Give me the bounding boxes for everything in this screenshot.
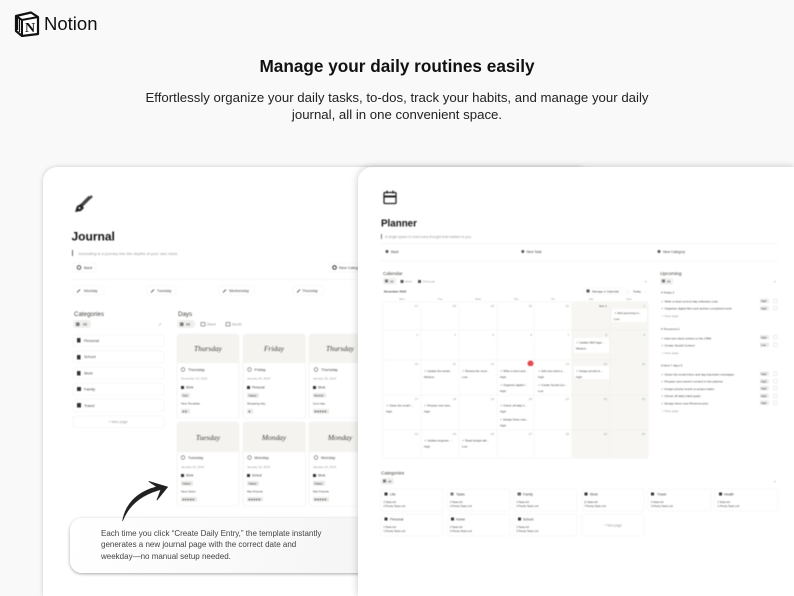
categories list: ↗ (158, 322, 161, 327)
journal card: Thursday: Sad (182, 394, 188, 398)
calendar day numbers: 23 (642, 397, 645, 401)
days tabs (177, 311, 242, 328)
journal card: Thursday: Thursday (188, 367, 205, 372)
journal card: Tuesday: Tuesday (188, 455, 203, 460)
journal card: Monday: ★★★★★ (248, 498, 261, 502)
upcoming list: All (667, 280, 671, 284)
planner action buttons: New Task (526, 250, 542, 254)
categories section: + New page (604, 524, 622, 528)
calendar tasks: Low (462, 444, 468, 448)
journal card: Monday 2: ★★★★★ (314, 498, 327, 502)
calendar day numbers: 6 (530, 333, 532, 337)
logo: Notion: N (25, 21, 35, 36)
calendar tasks: ✓ Prepare next wee... (424, 404, 452, 408)
calendar day numbers: 13 (529, 362, 532, 366)
journal card: Friday: Friday (263, 344, 285, 353)
journal card: Friday: Shopping day (247, 402, 266, 406)
calendar grid (383, 297, 648, 458)
calendar tasks: Medium (576, 346, 587, 350)
upcoming list: ✓ Check off daily habit goals (661, 394, 701, 398)
planner action buttons: New Category (663, 250, 685, 254)
new category button (329, 263, 389, 272)
journal card: Monday 2: Met Friends (313, 490, 329, 494)
weekday buttons: Thursday (302, 289, 318, 293)
upcoming list: ✓ Create Social Content (661, 344, 695, 348)
planner tagline: A single space to hold every thought that matters to you. (385, 235, 472, 239)
journal card: Thursday 2: January 25, 2024 (313, 376, 337, 380)
categories section: Personal (390, 518, 404, 522)
journal card: Monday: School (252, 474, 262, 478)
categories section: 0 Tasks left (516, 526, 529, 529)
categories list: Work (84, 372, 93, 376)
journal card: Tuesday: New Client (181, 490, 196, 494)
journal card: Friday: Personal (252, 386, 265, 390)
categories section: Work (590, 492, 598, 496)
upcoming priority tags: High (761, 372, 767, 376)
calendar tasks: High (500, 424, 506, 428)
journal card: Thursday 2: ★★★★★ (314, 410, 327, 414)
categories list: Travel (84, 404, 95, 408)
calendar heading and tabs: Manage in Calendar (592, 290, 619, 294)
categories section: 2 Tasks left (384, 526, 396, 529)
calendar grid: Tue (438, 297, 443, 301)
calendar day numbers: 4 (454, 333, 456, 337)
calendar grid: Mon (399, 297, 405, 301)
calendar day numbers: 18 (453, 397, 456, 401)
journal card: Thursday 2: Thursday (321, 367, 338, 372)
calendar day numbers (415, 304, 645, 436)
upcoming list: ✓ Add new client entries to the CRM (661, 336, 711, 340)
categories list: Categories (74, 311, 104, 318)
upcoming list: ✓ Assign priority levels to project tasks (661, 387, 715, 391)
calendar day numbers: 10 (415, 362, 418, 366)
journal card: Monday: Monday (254, 455, 269, 460)
weekday buttons (73, 286, 324, 295)
calendar heading and tabs: ↗ (644, 280, 647, 284)
categories section: 0 Tasks left (450, 526, 463, 529)
calendar tasks: ✓ Design three new... (500, 418, 528, 422)
back button (73, 263, 96, 272)
categories section: Categories (381, 470, 405, 476)
journal card: Thursday 2 (309, 334, 371, 418)
upcoming list: ✓ Clean the email inbox and tag important messages (661, 372, 735, 376)
journal card: Monday: Happy (248, 482, 257, 486)
upcoming priority tags: High (761, 306, 767, 310)
journal card: Tuesday: Happy (182, 482, 191, 486)
categories section: 11 Tasks left (584, 501, 598, 504)
categories section: All (388, 480, 392, 484)
categories section: Life (390, 492, 396, 496)
calendar day numbers: 2 (643, 304, 645, 308)
calendar tasks: ✓ Update the weekl... (424, 369, 452, 373)
journal card: Thursday 2: Work (318, 386, 326, 390)
categories section: 0 Tasks left (450, 501, 463, 504)
calendar heading and tabs: Calendar (383, 271, 403, 277)
calendar tasks: ✓ Check off daily h... (500, 404, 527, 408)
upcoming priority tags: High (761, 394, 767, 398)
calendar day numbers: 21 (566, 397, 569, 401)
calendar heading and tabs: ‹ (628, 290, 629, 294)
upcoming list: + New page (662, 314, 679, 318)
categories list: Family (84, 388, 95, 392)
weekday buttons: Wednesday (229, 289, 249, 293)
calendar grid: Thu (514, 297, 519, 301)
calendar tasks: High (424, 410, 430, 414)
journal card: Thursday: New Template (181, 402, 200, 406)
panel: planner (358, 167, 794, 596)
calendar day numbers: 5 (492, 333, 494, 337)
categories section: 0 Tasks left (651, 501, 664, 504)
journal card: Monday 2: January 22, 2024 (313, 465, 337, 469)
upcoming priority tags: High (761, 336, 767, 340)
journal card: Friday: Happy (248, 394, 257, 398)
back button: Back (84, 266, 93, 270)
journal card: Thursday 2: Thursday (326, 344, 355, 353)
planner action buttons (386, 250, 685, 254)
calendar tasks: ✓ Read budget tab... (462, 438, 489, 442)
calendar tasks: ✓ Add upcoming m... (614, 311, 641, 315)
calendar tasks: ✓ Update progress ... (424, 438, 452, 442)
upcoming list: ▾ Tomorrow 2 (661, 327, 680, 331)
journal card: Friday: ★ (248, 410, 251, 414)
calendar day numbers: 29 (604, 432, 607, 436)
categories section: 0 Tasks left (516, 501, 529, 504)
upcoming list: ✓ Prepare next week's content in the planner (661, 380, 723, 384)
categories section: 7 Priority Tasks Left (584, 505, 606, 508)
calendar day numbers: 30 (642, 432, 645, 436)
upcoming list: ✓ Organise digital files and archive completed work (661, 306, 732, 310)
categories section: 2 Tasks left (384, 501, 396, 504)
calendar day numbers: 12 (491, 362, 494, 366)
calendar tasks: Low (462, 375, 468, 379)
categories list: School (84, 355, 96, 359)
categories list (73, 311, 164, 428)
calendar day numbers: 14 (566, 362, 569, 366)
journal card: Thursday: ★★ (182, 410, 188, 414)
calendar day numbers: 28 (453, 304, 456, 308)
categories section: 0 Priority Tasks Left (450, 505, 472, 508)
categories list: + New page (108, 420, 128, 424)
planner heading: Planner (381, 218, 417, 230)
calendar day numbers: 17 (415, 397, 418, 401)
calendar day numbers: 25 (453, 432, 456, 436)
calendar tasks: ✓ Review the mont... (462, 369, 489, 373)
journal card: Thursday (177, 334, 239, 418)
upcoming priority tags: Low (761, 343, 766, 347)
subtitle (145, 90, 649, 122)
journal card: Monday 2 (309, 422, 371, 506)
weekday buttons: Monday (84, 289, 98, 293)
journal card: Tuesday (177, 422, 239, 506)
calendar day numbers: 19 (491, 397, 494, 401)
subtitle: journal, all in one convenient space. (292, 107, 502, 122)
journal card: Monday: January 22, 2024 (247, 465, 271, 469)
upcoming priority tags: High (761, 380, 767, 384)
categories section: Tasks (456, 492, 465, 496)
calendar tasks: High (576, 375, 582, 379)
title: Manage your daily routines easily (259, 56, 535, 76)
calendar tasks: ✓ Add new client a... (538, 369, 565, 373)
new category button: New Category (339, 266, 363, 270)
calendar day numbers: Nov 1 (599, 304, 607, 308)
categories section: 0 Priority Tasks Left (651, 505, 673, 508)
journal card: Monday 2: Happy (314, 482, 323, 486)
logo: Notion (14, 11, 97, 37)
callout: create daily entry: generates a new journal page with the correct date and (101, 540, 296, 549)
upcoming list: ✓ Design three new Pinterest pins (661, 402, 709, 406)
calendar day numbers: 15 (604, 362, 607, 366)
calendar day numbers: 24 (415, 432, 418, 436)
categories section: 1 Tasks left (718, 501, 730, 504)
upcoming priority tags (760, 298, 777, 405)
arrow: points to journal cards (122, 481, 168, 522)
journal card: Tuesday: Tuesday (196, 433, 221, 442)
upcoming priority tags: High (761, 401, 767, 405)
planner action buttons: Back (391, 250, 399, 254)
upcoming priority tags: High (761, 386, 767, 390)
calendar tasks: High (500, 410, 506, 414)
categories section (381, 470, 778, 536)
calendar day numbers: 27 (529, 432, 532, 436)
journal card: Friday: Friday (254, 367, 266, 372)
calendar day numbers: 8 (605, 333, 607, 337)
upcoming list: ✓ Write a short end-of-day reflection note (661, 300, 718, 304)
calendar heading and tabs (383, 271, 647, 294)
journal card: Monday 2: Work (318, 474, 326, 478)
calendar day numbers: 31 (566, 304, 569, 308)
days tabs: Days (178, 311, 192, 318)
calendar tasks: ✓ Assign priority le... (576, 369, 603, 373)
calendar tasks: Medium (424, 375, 435, 379)
upcoming list (660, 271, 777, 413)
calendar day numbers: 9 (643, 333, 645, 337)
categories section: 1 Priority Tasks Left (718, 505, 740, 508)
categories section: Travel (657, 492, 667, 496)
calendar heading and tabs: › (645, 290, 646, 294)
subtitle: Effortlessly organize your daily tasks, to-dos, track your habits, and manage your daily (145, 90, 649, 105)
calendar tasks: ✓ Organise digital f... (500, 383, 528, 387)
weekday buttons: Tuesday (157, 289, 172, 293)
upcoming list: + New page (662, 409, 679, 413)
calendar heading and tabs: All (390, 280, 394, 284)
journal card: Thursday: Thursday (194, 344, 223, 353)
days tabs: All (186, 322, 190, 326)
calendar tasks: Low (614, 317, 620, 321)
calendar day numbers: 29 (491, 304, 494, 308)
categories list: Personal (84, 339, 99, 343)
calendar day numbers: 27 (415, 304, 418, 308)
journal card: Monday 2: Monday (321, 455, 335, 460)
icon: calendar (384, 190, 396, 204)
calendar tasks: High (538, 375, 544, 379)
upcoming list: ▾ Today 2 (661, 290, 674, 294)
calendar tasks: ✓ Create Social Con... (538, 383, 567, 387)
calendar day numbers: 22 (604, 397, 607, 401)
categories section: ↗ (773, 480, 776, 484)
journal card: Tuesday: ★★★★★ (182, 498, 195, 502)
calendar tasks: ✓ Write a short and... (500, 369, 528, 373)
calendar day numbers: 28 (566, 432, 569, 436)
journal tagline: Journaling is a journey into the depths of your own mind. (78, 251, 178, 256)
calendar heading and tabs: Today (633, 290, 642, 294)
days tabs: Month (232, 322, 242, 326)
calendar heading and tabs: November 2023 (384, 290, 407, 294)
upcoming list: ▾ Next 7 days 5 (661, 364, 683, 368)
categories section: Home (456, 518, 465, 522)
calendar grid: Sat (589, 297, 593, 301)
category icons (384, 492, 722, 520)
calendar day numbers: 11 (453, 362, 456, 366)
calendar day numbers: 20 (529, 397, 532, 401)
calendar tasks: Low (538, 389, 544, 393)
calendar tasks: ✓ Update SEO tags ... (576, 340, 605, 344)
journal card: Friday: January 26, 2024 (247, 376, 271, 380)
calendar tasks: High (500, 389, 506, 393)
journal card: Thursday 2: Gym day (313, 402, 326, 406)
categories section: 0 Priority Tasks Left (384, 505, 406, 508)
journal card: Thursday: Work (186, 386, 194, 390)
upcoming priority tags: High (761, 299, 767, 303)
journal card: Monday: Monday (261, 433, 287, 442)
calendar tasks: High (500, 375, 506, 379)
journal heading: Journal (72, 230, 115, 244)
calendar tasks: ✓ Clean the email i... (386, 404, 413, 408)
calendar heading and tabs: Personal (423, 280, 435, 284)
journal card: Friday (243, 334, 306, 418)
journal card: Thursday 2: Neutral (314, 394, 323, 398)
journal card: Monday: Met Friends (247, 490, 263, 494)
categories section: 1 Priority Tasks Left (384, 530, 406, 533)
categories section: 0 Priority Tasks Left (450, 530, 472, 533)
callout: create daily entry: weekday—no manual setup needed. (101, 552, 231, 561)
calendar day numbers: 16 (642, 362, 645, 366)
calendar tasks: High (424, 444, 430, 448)
panel: journal (43, 167, 590, 596)
icon: fountain pen (75, 196, 92, 212)
categories section: Family (523, 492, 533, 496)
journal card: Tuesday: Work (186, 474, 194, 478)
upcoming list: ↗ (773, 280, 776, 284)
categories section: 0 Priority Tasks Left (516, 505, 539, 508)
calendar tasks: High (386, 410, 392, 414)
calendar day numbers: 30 (529, 304, 532, 308)
journal card: Tuesday: January 23, 2024 (181, 465, 205, 469)
categories section: Health (724, 492, 734, 496)
logo: Notion: Notion (44, 13, 97, 34)
callout: create daily entry (70, 518, 400, 573)
days tabs: Week (207, 322, 216, 326)
categories list: All (83, 322, 87, 326)
categories section: School (523, 518, 534, 522)
calendar day numbers: 7 (567, 333, 569, 337)
calendar grid: Fri (551, 297, 555, 301)
calendar day numbers: 3 (416, 333, 418, 337)
journal card: Monday 2: Monday (327, 433, 353, 442)
journal card: Thursday: November 13, 2023 (181, 376, 208, 380)
callout: create daily entry: Each time you click “Create Daily Entry,” the template instantly (101, 529, 321, 538)
upcoming list: + New page (662, 351, 679, 355)
categories section: 0 Priority Tasks Left (516, 530, 539, 533)
calendar heading and tabs: Work (405, 280, 412, 284)
upcoming list: Upcoming (660, 271, 682, 277)
calendar day numbers: 26 (491, 432, 494, 436)
calendar tasks (384, 309, 647, 450)
journal card: Monday (243, 422, 306, 506)
calendar grid: Wed (475, 297, 481, 301)
calendar grid: Sun (627, 297, 632, 301)
